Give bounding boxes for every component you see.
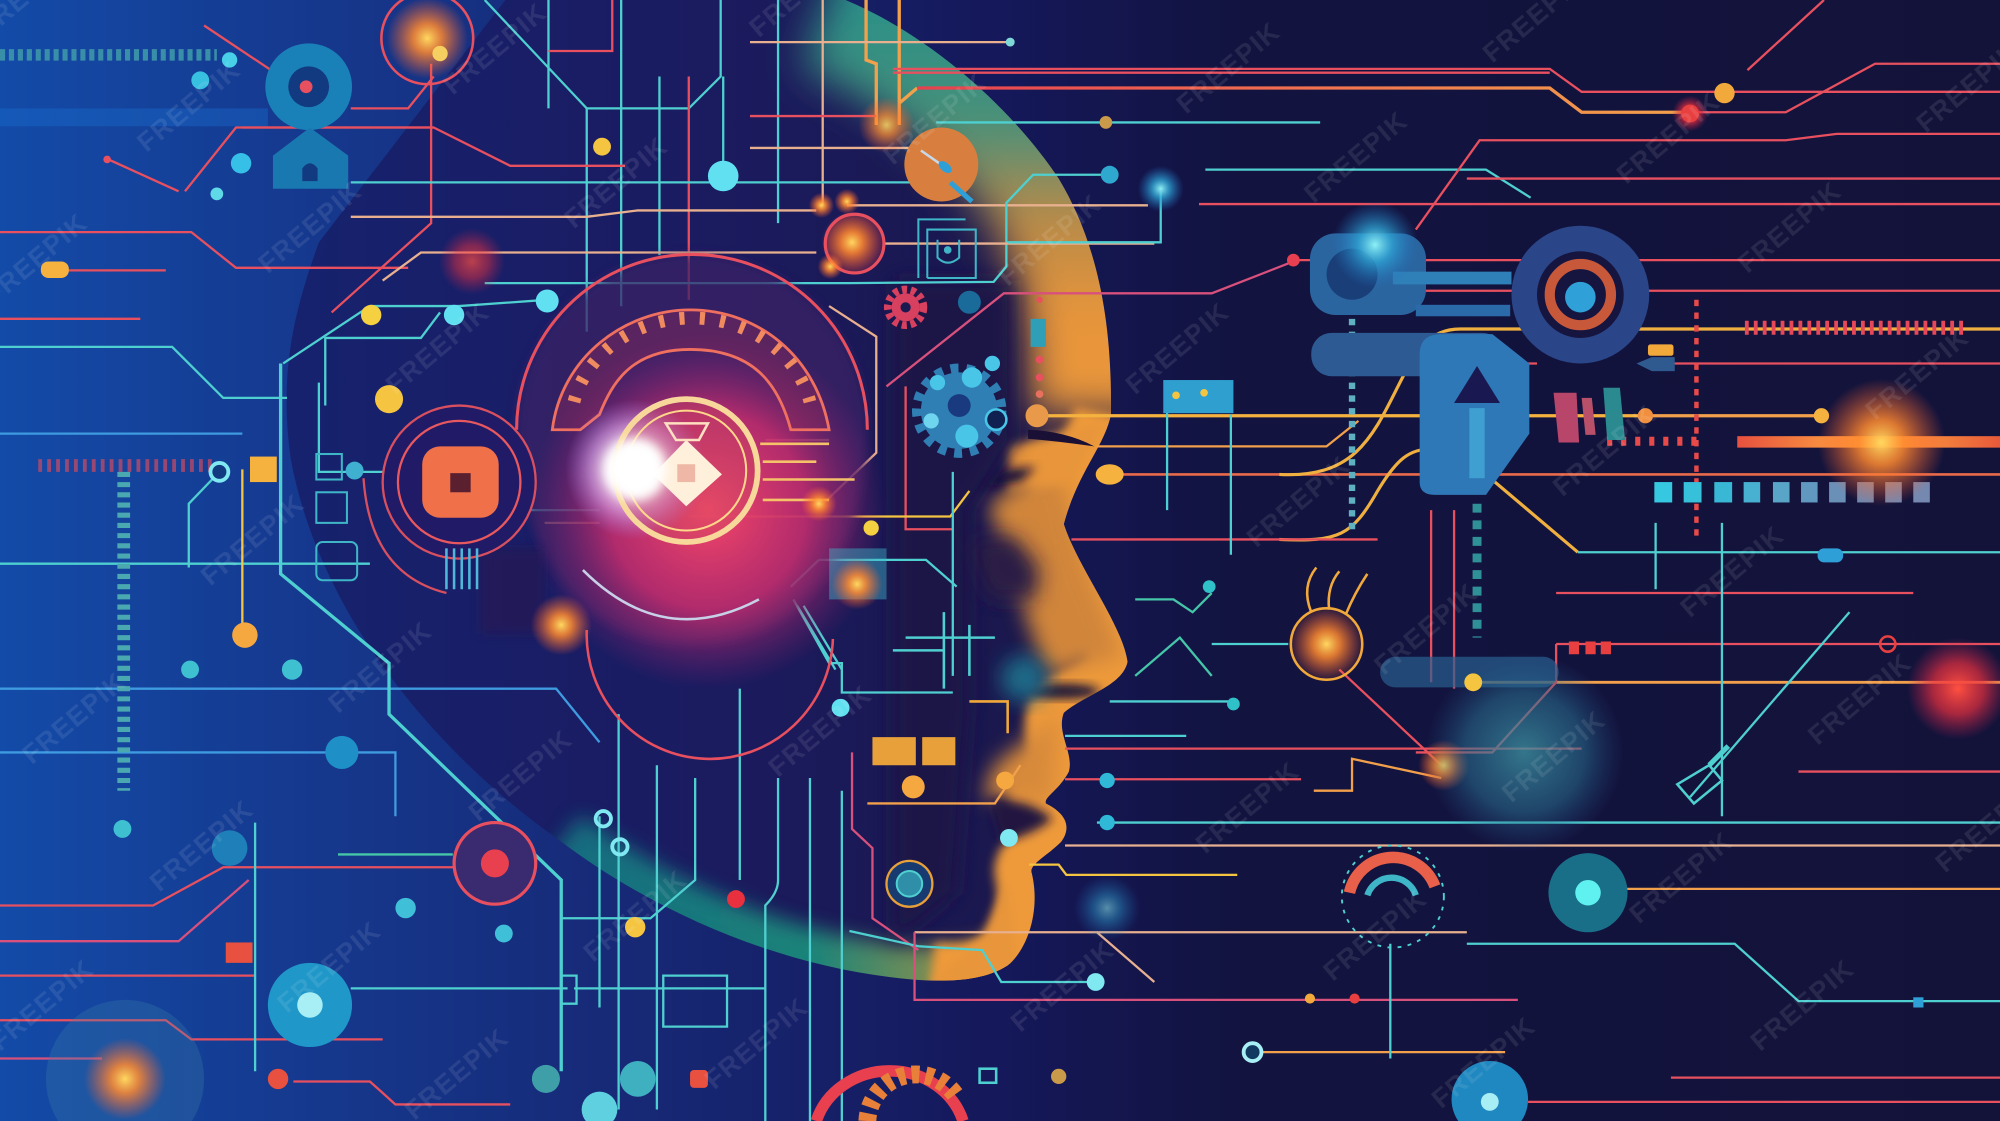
right UI: pill <box>1311 333 1503 376</box>
nose shadow <box>1023 684 1099 699</box>
right UI: rounded camera block <box>1310 233 1426 315</box>
left chip emblem <box>364 406 536 593</box>
watermark: FREEPIK <box>131 54 246 158</box>
watermark: FREEPIK <box>1171 16 1286 119</box>
watermark: FREEPIK <box>1675 520 1790 623</box>
watermark: FREEPIK <box>877 67 992 170</box>
emblem: lower ring <box>587 630 833 759</box>
watermark: FREEPIK <box>1241 450 1356 553</box>
watermark: FREEPIK <box>144 794 259 897</box>
watermark: FREEPIK <box>1120 297 1235 400</box>
watermark: FREEPIK <box>1860 322 1975 425</box>
watermark: FREEPIK <box>1802 647 1917 751</box>
emblem: outer ring <box>517 254 867 430</box>
emblem: white flare halo <box>565 399 705 539</box>
emblem: band marks <box>574 318 810 402</box>
right UI: eye + blue panels <box>1310 226 1675 495</box>
circuit lines: right <box>893 0 2000 1102</box>
circuit lines: head <box>242 0 1320 1121</box>
right UI: hex shield <box>1420 334 1529 495</box>
face orange glow <box>931 414 1128 981</box>
watermark: FREEPIK <box>1190 756 1305 859</box>
icon: top-left location pin <box>265 43 352 189</box>
small pills and red blocks <box>41 261 1923 1088</box>
head glow rim, clipped to silhouette <box>561 0 1128 982</box>
emblem: pink glow <box>529 332 886 689</box>
dashed bars <box>0 55 1964 791</box>
watermark: FREEPIK <box>1317 883 1432 987</box>
watermark: FREEPIK <box>463 724 578 827</box>
watermark: FREEPIK <box>1611 86 1726 190</box>
watermark: FREEPIK <box>1745 953 1860 1057</box>
watermark: FREEPIK <box>1547 399 1662 502</box>
eye shadow <box>966 467 1036 491</box>
watermark: FREEPIK <box>1426 1011 1541 1114</box>
right UI: bars <box>1393 272 1511 284</box>
watermark: FREEPIK <box>437 0 552 100</box>
watermark: FREEPIK <box>195 488 310 591</box>
right UI: eye lens <box>1511 226 1649 363</box>
watermark: FREEPIK <box>1005 934 1120 1038</box>
watermark: FREEPIK <box>1624 826 1739 929</box>
large cyan discs <box>212 736 1628 1121</box>
gauge icon <box>1342 846 1444 948</box>
emblem: lower dark pocket <box>480 548 545 634</box>
emblem: arrow arc <box>583 570 759 619</box>
cheek fill <box>989 459 1122 676</box>
watermark: FREEPIK <box>1732 176 1847 279</box>
forehead rim glow <box>829 0 1111 414</box>
small boxes beside chip <box>316 454 357 580</box>
watermark: FREEPIK <box>323 615 438 719</box>
brow line <box>1028 430 1094 446</box>
watermark: FREEPIK <box>578 864 693 967</box>
icon: blue gear <box>958 291 981 314</box>
mouth shadow <box>990 800 1052 842</box>
circuit node orb <box>825 214 884 273</box>
watermark: FREEPIK <box>559 131 674 234</box>
icon: orange square <box>250 457 277 482</box>
head silhouette <box>287 0 1128 982</box>
watermark: FREEPIK <box>992 188 1107 292</box>
jaw rim glow <box>561 842 1008 981</box>
emblem: gold coin <box>615 399 758 542</box>
small head details <box>829 219 1233 907</box>
row of cyan squares <box>1654 482 1930 502</box>
watermark: FREEPIK <box>252 176 367 279</box>
watermark: FREEPIK <box>763 679 878 783</box>
watermark: FREEPIK <box>1369 577 1484 681</box>
watermark: FREEPIK <box>16 667 131 770</box>
bottom gear <box>816 1071 963 1121</box>
dark brain area <box>893 281 1014 944</box>
flame orb <box>1288 606 1365 682</box>
orange disc with blue probes <box>904 128 978 201</box>
circuit lines: left <box>0 26 599 1104</box>
emblem: dark dome fill <box>517 254 867 644</box>
flame orange bar <box>1737 436 2000 448</box>
watermark: FREEPIK <box>699 992 814 1095</box>
icon: red gear <box>892 293 920 321</box>
left band glow <box>0 108 268 126</box>
gear cluster in brain <box>888 289 1006 451</box>
watermark: FREEPIK <box>1496 705 1611 808</box>
emblem: arched band <box>552 310 829 430</box>
watermark: FREEPIK <box>1298 105 1413 209</box>
watermark: FREEPIK <box>272 915 387 1018</box>
central brain emblem <box>480 254 886 759</box>
watermark: FREEPIK <box>380 297 495 400</box>
